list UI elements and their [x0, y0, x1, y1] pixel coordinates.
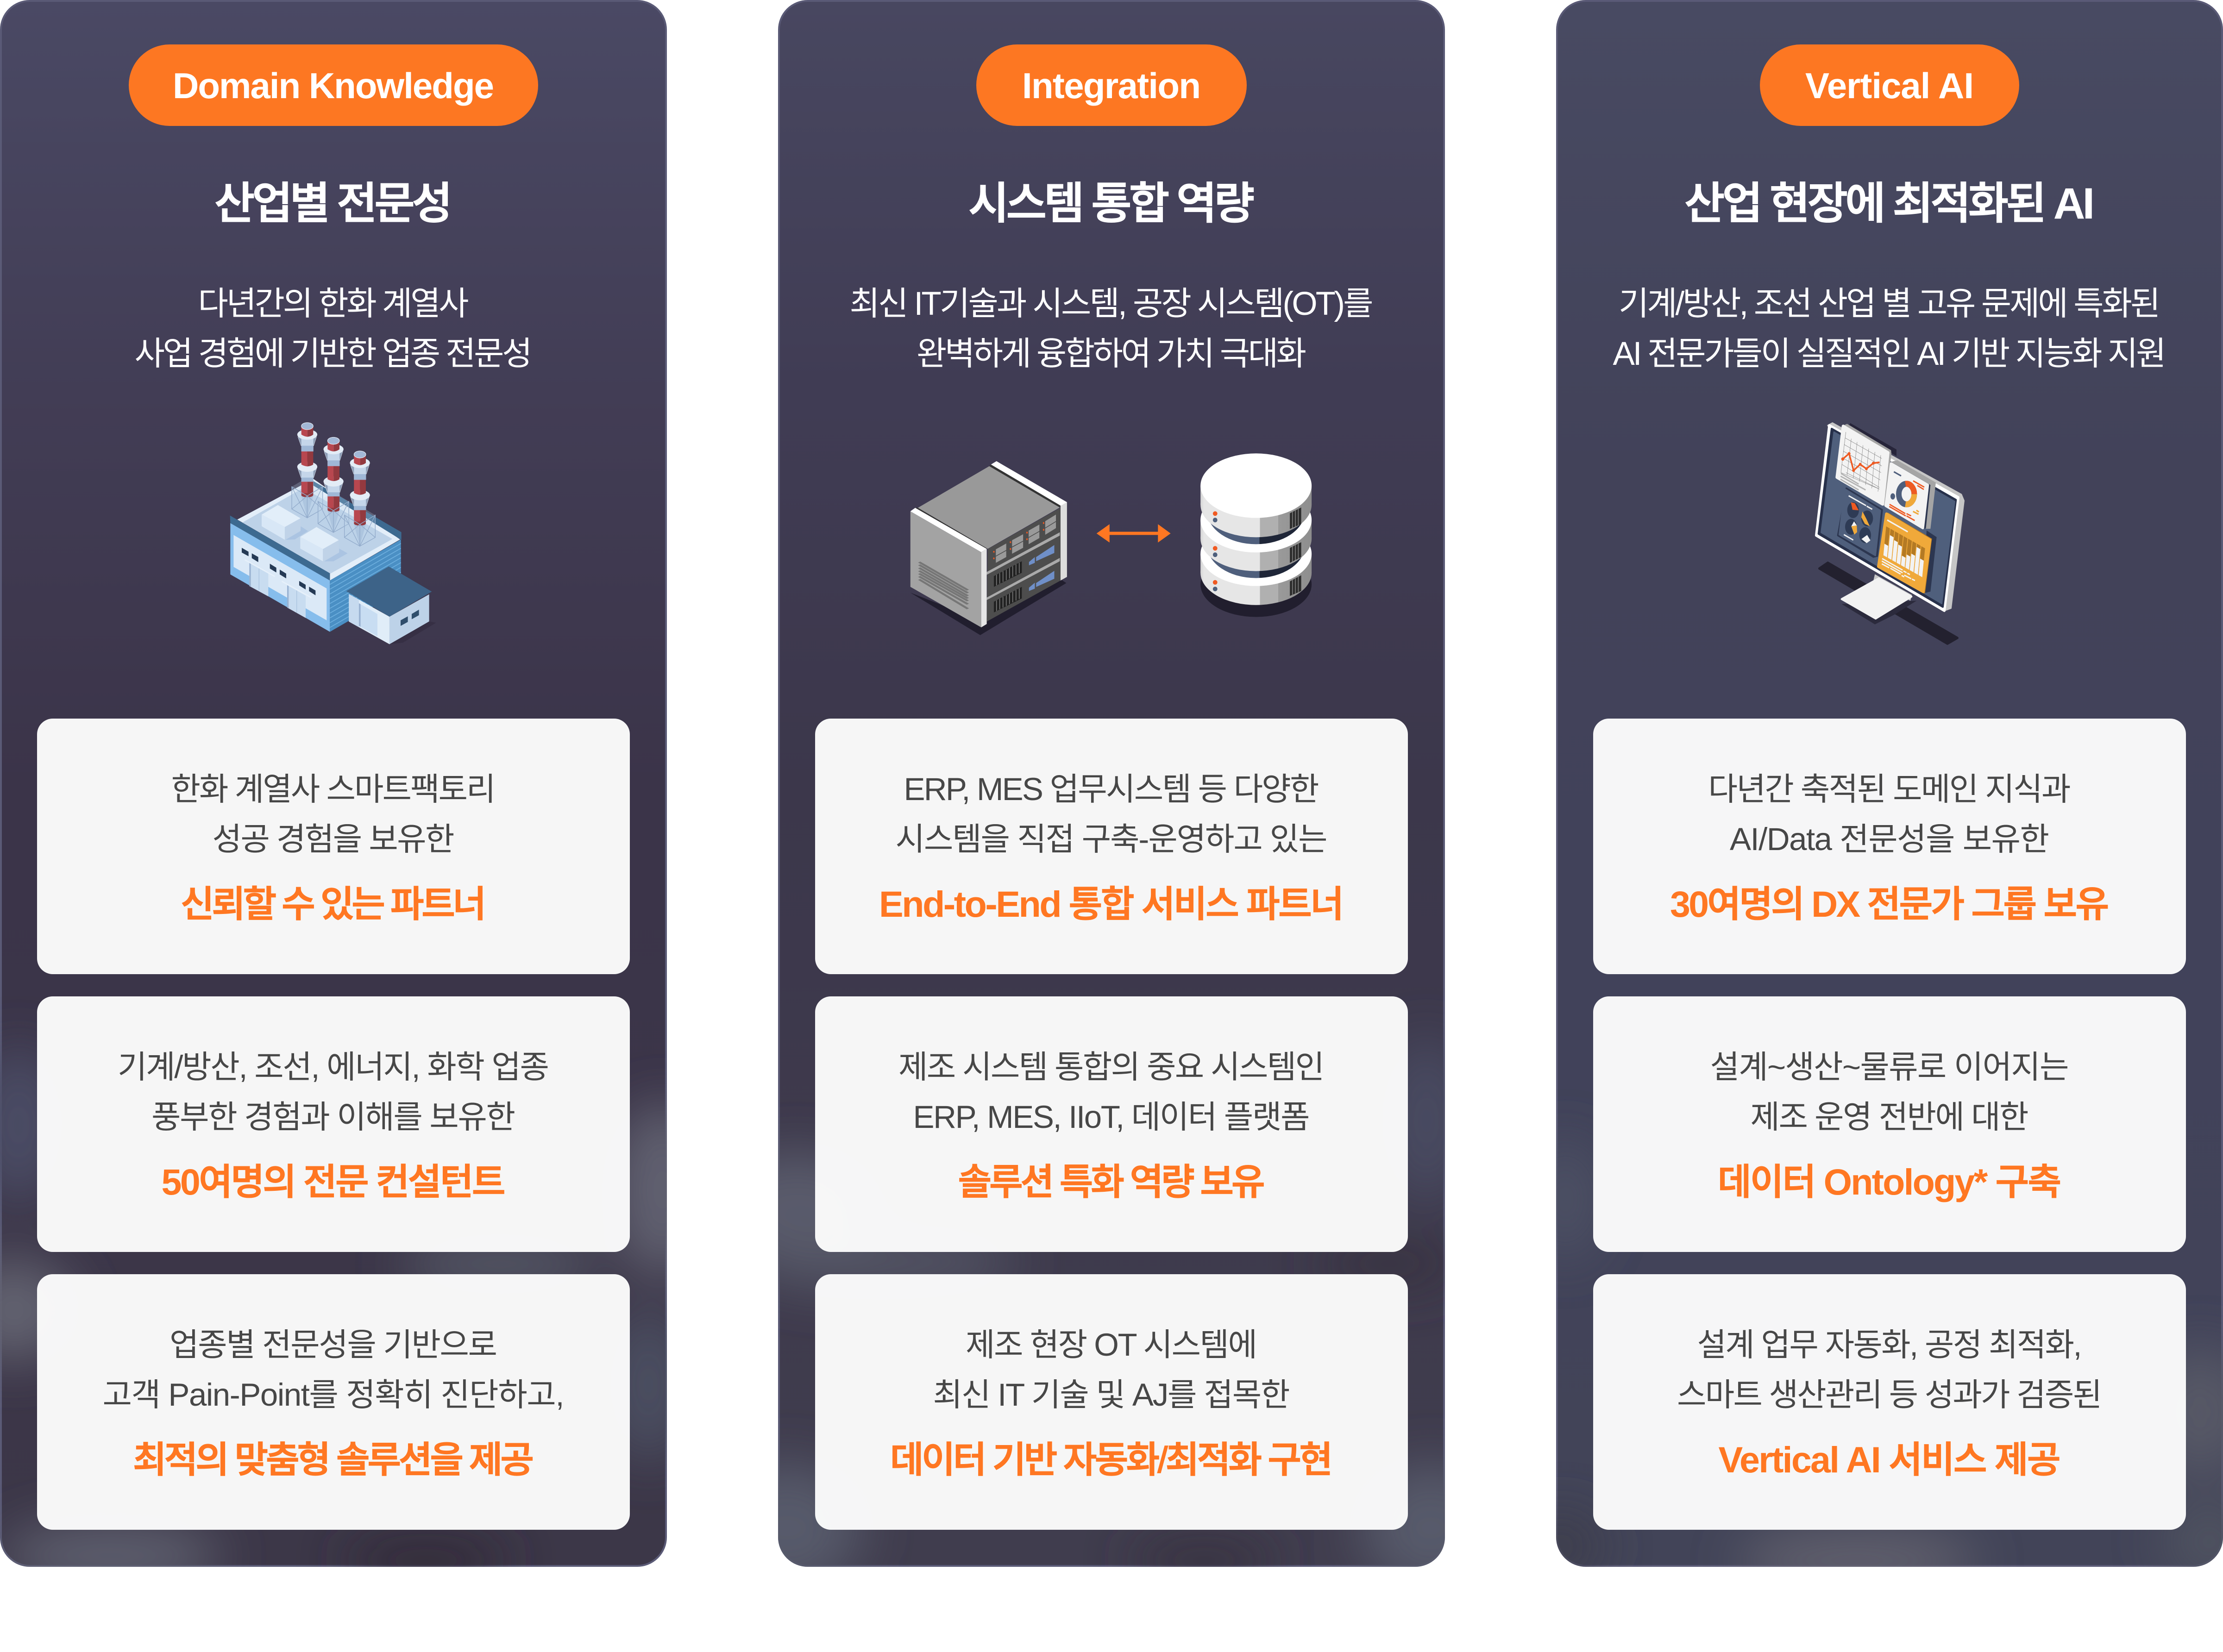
card 2: 설계~생산~물류로 이어지는 [1710, 1049, 2069, 1085]
card 2: 솔루션 특화 역량 보유 [958, 1161, 1265, 1202]
card 2: 50여명의 전문 컨설턴트 [161, 1161, 506, 1202]
card 2: ERP, MES, IIoT, 데이터 플랫폼 [913, 1099, 1310, 1135]
card 1: End-to-End 통합 서비스 파트너 [879, 883, 1344, 925]
description: 최신 IT기술과 시스템, 공장 시스템(OT)를 [849, 286, 1374, 322]
heading: 시스템 통합 역량 [968, 179, 1255, 228]
tag: Vertical AI [1760, 44, 2019, 126]
card 1: AI/Data 전문성을 보유한 [1730, 821, 2049, 857]
card 3: Vertical AI 서비스 제공 [1718, 1439, 2061, 1480]
description: 다년간의 한화 계열사 [198, 286, 469, 322]
card 3: 스마트 생산관리 등 성과가 검증된 [1677, 1377, 2102, 1413]
description [849, 286, 1374, 372]
card 3 [37, 1274, 630, 1530]
panel background [1, 1, 666, 1566]
description: 완벽하게 융합하여 가치 극대화 [917, 336, 1306, 372]
card 3: 최적의 맞춤형 솔루션을 제공 [133, 1439, 534, 1480]
description [1613, 286, 2166, 372]
description: 기계/방산, 조선 산업 별 고유 문제에 특화된 [1619, 286, 2160, 322]
panel: vertical AI [1519, 1, 2223, 1588]
tag: Integration: Integration [1022, 65, 1201, 106]
panel: integration [778, 0, 1445, 1567]
description: AI 전문가들이 실질적인 AI 기반 지능화 지원 [1613, 336, 2166, 372]
card 2: 데이터 Ontology* 구축 [1718, 1161, 2061, 1202]
card 1: 성공 경험을 보유한 [212, 821, 455, 857]
icon: server rack [911, 461, 1067, 635]
card 3: 제조 현장 OT 시스템에 [966, 1327, 1257, 1363]
heading: 산업 현장에 최적화된 AI [1684, 179, 2095, 228]
card 2: 제조 시스템 통합의 중요 시스템인 [898, 1049, 1325, 1085]
arrow: two-way [1097, 524, 1171, 543]
card 1 [1593, 719, 2186, 974]
panel background [1557, 1, 2222, 1566]
card 2: 풍부한 경험과 이해를 보유한 [151, 1099, 515, 1135]
tag: Vertical AI: Vertical AI [1805, 65, 1974, 106]
description [134, 286, 533, 372]
description: 사업 경험에 기반한 업종 전문성 [134, 336, 533, 372]
card 3: 고객 Pain-Point를 정확히 진단하고, [103, 1377, 564, 1413]
card 3: 최신 IT 기술 및 AJ를 접목한 [933, 1377, 1290, 1413]
card 1: 다년간 축적된 도메인 지식과 [1708, 771, 2071, 807]
card 2: 제조 운영 전반에 대한 [1751, 1099, 2028, 1135]
card 1 [815, 719, 1408, 974]
panel: domain knowledge [0, 1, 713, 1588]
card 1: 신뢰할 수 있는 파트너 [181, 883, 486, 925]
tag: Integration [976, 44, 1247, 126]
card 1 [37, 719, 630, 974]
card 3 [815, 1274, 1408, 1530]
card 2 [1593, 996, 2186, 1252]
card 2 [815, 996, 1408, 1252]
card 3: 데이터 기반 자동화/최적화 구현 [890, 1439, 1333, 1480]
card 3 [1593, 1274, 2186, 1530]
card 3: 업종별 전문성을 기반으로 [170, 1327, 497, 1363]
card 1: 30여명의 DX 전문가 그룹 보유 [1670, 883, 2109, 925]
card 1: 시스템을 직접 구축-운영하고 있는 [896, 821, 1327, 857]
card 2 [37, 996, 630, 1252]
card 1: 한화 계열사 스마트팩토리 [171, 771, 496, 807]
card 2: 기계/방산, 조선, 에너지, 화학 업종 [118, 1049, 549, 1085]
tag: Domain Knowledge: Domain Knowledge [173, 65, 494, 106]
card 1: ERP, MES 업무시스템 등 다양한 [904, 771, 1319, 807]
card 3: 설계 업무 자동화, 공정 최적화, [1697, 1327, 2082, 1363]
heading: 산업별 전문성 [214, 179, 452, 228]
tag: Domain Knowledge [129, 44, 538, 126]
icon: database stack [1200, 453, 1312, 617]
icon: factory [230, 423, 436, 644]
icon: monitor dashboard [1816, 423, 1964, 644]
panel background [779, 1, 1444, 1566]
